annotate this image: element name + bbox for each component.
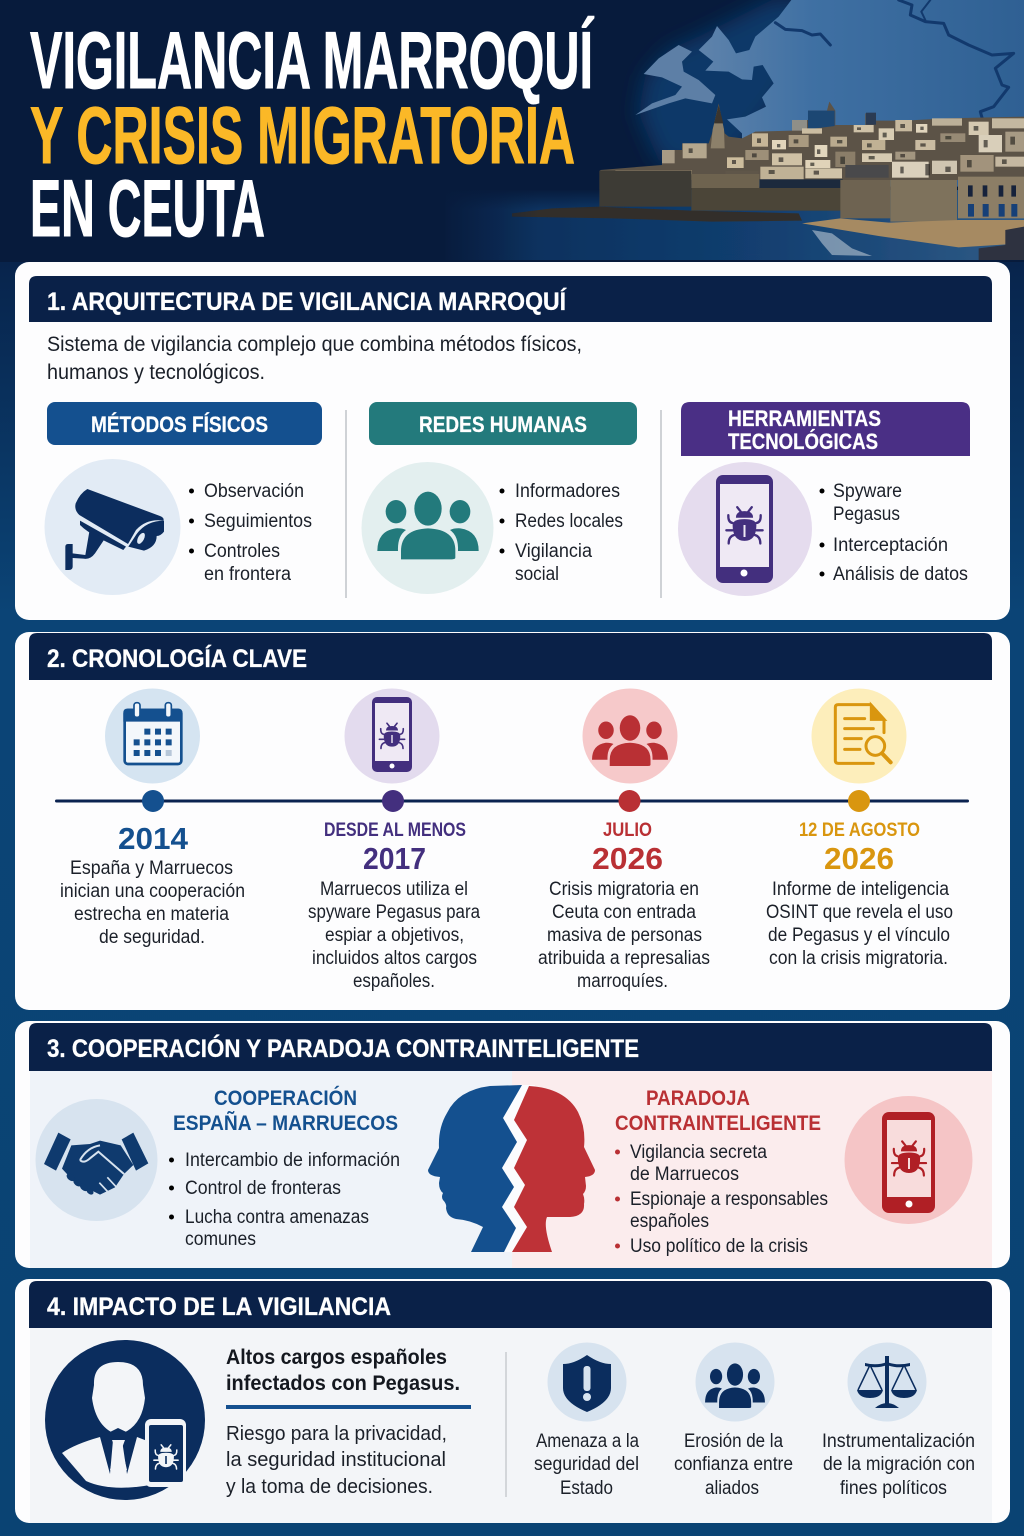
event july 2026: masiva de personas [547, 925, 702, 946]
list: cooperation: Control de fronteras [185, 1178, 341, 1199]
title: Y CRISIS MIGRATORIA [30, 91, 575, 181]
impact: trust erosion: Erosión de la [684, 1431, 783, 1452]
intro text [47, 333, 582, 384]
cooperation heading [173, 1086, 398, 1135]
key finding: Altos cargos españoles [226, 1346, 447, 1369]
icon: phone with spyware bug [678, 462, 812, 596]
panel 4: impacto de la vigilancia [15, 1279, 1010, 1523]
list: métodos físicos: Controles [204, 541, 280, 562]
impact: state security: Estado [560, 1478, 613, 1499]
key finding: la seguridad institucional [226, 1448, 446, 1471]
list: herramientas tecnológicas: Interceptación [833, 535, 948, 556]
event 2017: Marruecos utiliza el [320, 879, 468, 900]
section 1 heading [29, 276, 992, 322]
list: paradox: Uso político de la crisis [630, 1236, 808, 1257]
event july 2026: Crisis migratoria en [549, 879, 699, 900]
impact: political instrumentalization [822, 1342, 975, 1499]
header navy base [0, 0, 1024, 262]
event 2014: inician una cooperación [60, 881, 245, 902]
fade into navy [439, 147, 539, 260]
event july 2026: Ceuta con entrada [552, 902, 696, 923]
dot august 2026 [848, 790, 870, 812]
icon: split heads [428, 1085, 595, 1252]
section 1 heading: 1. ARQUITECTURA DE VIGILANCIA MARROQUÍ [47, 287, 567, 316]
event 2017: españoles. [353, 971, 435, 992]
title: VIGILANCIA MARROQUÍ [30, 15, 594, 106]
list: cooperation: Intercambio de información [185, 1150, 400, 1171]
key finding: y la toma de decisiones. [226, 1475, 433, 1498]
event august 2026: 12 DE AGOSTO [799, 820, 920, 841]
list: cooperation: Lucha contra amenazas [185, 1207, 369, 1228]
list: métodos físicos: en frontera [204, 564, 291, 585]
white crack [496, 1085, 535, 1252]
title [30, 15, 594, 254]
event july 2026: 2026 [592, 841, 663, 876]
list: métodos físicos: Seguimientos [204, 511, 312, 532]
city buildings [600, 102, 1024, 188]
panel 3: cooperación y paradoja [15, 1021, 1010, 1268]
event august 2026: con la crisis migratoria. [769, 948, 948, 969]
title: EN CEUTA [30, 164, 265, 254]
map of the sky region [635, 0, 1024, 187]
list: herramientas tecnológicas [820, 481, 968, 585]
list: redes humanas: Informadores [515, 481, 620, 502]
icon: calendar [105, 688, 200, 784]
event 2017: 2017 [363, 841, 426, 876]
icon: human network [362, 462, 494, 594]
section 3 heading [29, 1023, 992, 1071]
event august 2026: OSINT que revela el uso [766, 902, 953, 923]
list: paradox: Espionaje a responsables [630, 1189, 828, 1210]
impact: state security [534, 1342, 639, 1499]
event july 2026 [538, 820, 710, 992]
intro text: humanos y tecnológicos. [47, 361, 265, 384]
event 2014: España y Marruecos [70, 858, 233, 879]
event 2014 [60, 821, 245, 948]
dot 2014 [142, 790, 164, 812]
key finding [226, 1346, 471, 1498]
icon: red phone with bug [844, 1096, 972, 1224]
pill: herramientas tecnológicas: HERRAMIENTAS [728, 406, 881, 431]
section 3 heading: 3. COOPERACIÓN Y PARADOJA CONTRAINTELIGENTE [47, 1033, 639, 1063]
list: cooperation [169, 1150, 400, 1250]
event 2017: incluidos altos cargos [312, 948, 477, 969]
list: redes humanas [500, 481, 623, 585]
paradox heading: CONTRAINTELIGENTE [615, 1112, 821, 1135]
icon: security camera [44, 459, 180, 595]
list: herramientas tecnológicas: Spyware [833, 481, 902, 502]
list: métodos físicos [189, 481, 312, 585]
icon: official with infected phone [45, 1340, 205, 1500]
section 2 heading [29, 633, 992, 680]
list: paradox [615, 1142, 828, 1257]
icon: phone with bug [344, 688, 440, 784]
fortress wall and shore [445, 171, 1024, 260]
event 2017: espiar a objetivos, [325, 925, 464, 946]
pill: métodos físicos [47, 402, 322, 445]
icon: crowd [582, 688, 678, 784]
section 4 heading [29, 1281, 992, 1328]
header banner image: map and city of Ceuta [439, 0, 1024, 260]
event 2014: 2014 [118, 821, 189, 856]
list: métodos físicos: Observación [204, 481, 304, 502]
event 2017: DESDE AL MENOS [324, 820, 466, 841]
panel 2: cronología clave [15, 632, 1010, 1010]
list: paradox: de Marruecos [630, 1164, 739, 1185]
impact: trust erosion: confianza entre [674, 1454, 793, 1475]
section 2 heading: 2. CRONOLOGÍA CLAVE [47, 644, 307, 673]
list: herramientas tecnológicas: Análisis de datos [833, 564, 968, 585]
event 2017: spyware Pegasus para [308, 902, 480, 923]
dot 2017 [382, 790, 404, 812]
pill: herramientas tecnológicas: TECNOLÓGICAS [728, 429, 878, 454]
event july 2026: marroquíes. [577, 971, 668, 992]
event july 2026: atribuida a represalias [538, 948, 710, 969]
icon: handshake [36, 1099, 158, 1221]
blue head [428, 1085, 522, 1252]
section 4 heading: 4. IMPACTO DE LA VIGILANCIA [47, 1293, 391, 1321]
sea top fade [439, 189, 599, 209]
left tinted area [30, 1070, 512, 1268]
red head [512, 1086, 595, 1252]
impact: political instrumentalization: de la migración con [823, 1454, 975, 1475]
list: herramientas tecnológicas: Pegasus [833, 504, 900, 525]
list: paradox: Vigilancia secreta [630, 1142, 767, 1163]
right tinted area [512, 1070, 992, 1268]
impact: state security: Amenaza a la [536, 1431, 639, 1452]
impact: political instrumentalization: Instrumentalización [822, 1431, 975, 1452]
list: redes humanas: Redes locales [515, 511, 623, 532]
impact: trust erosion [674, 1342, 793, 1499]
pill: redes humanas: REDES HUMANAS [419, 412, 587, 437]
icon: document with magnifier [812, 688, 906, 784]
paradox heading: PARADOJA [646, 1087, 750, 1110]
list: redes humanas: Vigilancia [515, 541, 592, 562]
cooperation heading: COOPERACIÓN [214, 1086, 357, 1110]
list: paradox: españoles [630, 1211, 709, 1232]
event 2014: estrecha en materia [74, 904, 229, 925]
timeline line [55, 800, 969, 802]
list: cooperation: comunes [185, 1229, 256, 1250]
impact: state security: seguridad del [534, 1454, 639, 1475]
event august 2026: Informe de inteligencia [772, 879, 949, 900]
intro text: Sistema de vigilancia complejo que combina métodos físicos, [47, 333, 582, 356]
event august 2026 [766, 820, 953, 969]
key finding: Riesgo para la privacidad, [226, 1422, 447, 1445]
pill: redes humanas [369, 402, 637, 445]
event august 2026: 2026 [824, 841, 894, 876]
dot july 2026 [618, 790, 640, 812]
event 2014: de seguridad. [99, 927, 205, 948]
panel 1: arquitectura de vigilancia [15, 262, 1010, 620]
pill: métodos físicos: MÉTODOS FÍSICOS [91, 412, 268, 437]
event july 2026: JULIO [603, 820, 652, 841]
inner tinted area [30, 1328, 992, 1523]
dark blue bay [639, 0, 812, 173]
pill: herramientas tecnológicas [681, 402, 970, 456]
event august 2026: de Pegasus y el vínculo [768, 925, 950, 946]
impact: trust erosion: aliados [705, 1478, 759, 1499]
key finding: infectados con Pegasus. [226, 1372, 460, 1395]
list: redes humanas: social [515, 564, 559, 585]
paradox heading [615, 1087, 821, 1135]
cooperation heading: ESPAÑA – MARRUECOS [173, 1112, 398, 1135]
impact: political instrumentalization: fines políticos [840, 1478, 947, 1499]
event 2017 [308, 820, 480, 992]
